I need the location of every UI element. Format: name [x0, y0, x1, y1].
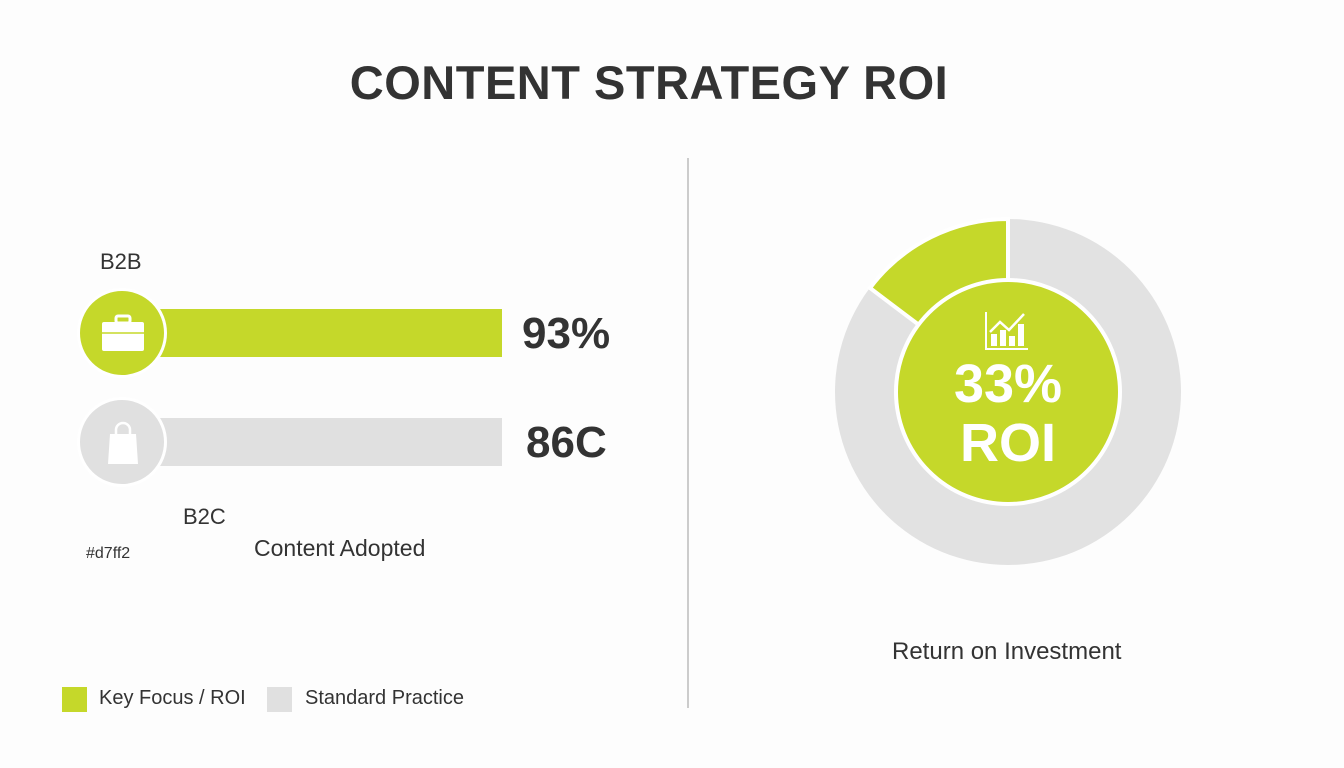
label: B2B: B2B [100, 249, 142, 274]
axis label: Content Adopted [254, 535, 425, 561]
legend [62, 687, 464, 712]
caption: Return on Investment: Return on Investment [892, 638, 1121, 665]
donut chart: ROI [960, 413, 1056, 473]
donut chart [835, 219, 1181, 565]
icon: briefcase [77, 288, 167, 378]
text: 33% ROI: 33% [954, 354, 1062, 414]
value: 93%: 93% [522, 309, 610, 358]
note: #d7ff2: #d7ff2 [86, 545, 130, 562]
bar: B2B [160, 309, 502, 357]
title: CONTENT STRATEGY ROI [350, 56, 948, 109]
icon: shopping bag [77, 397, 167, 487]
value: 86C: 86C [526, 418, 607, 467]
legend: Key Focus / ROI [99, 687, 246, 709]
icon: chart growth [986, 312, 1028, 349]
bar: B2C [160, 418, 502, 466]
legend: Standard Practice [305, 687, 464, 709]
label: B2C: B2C [183, 504, 226, 529]
